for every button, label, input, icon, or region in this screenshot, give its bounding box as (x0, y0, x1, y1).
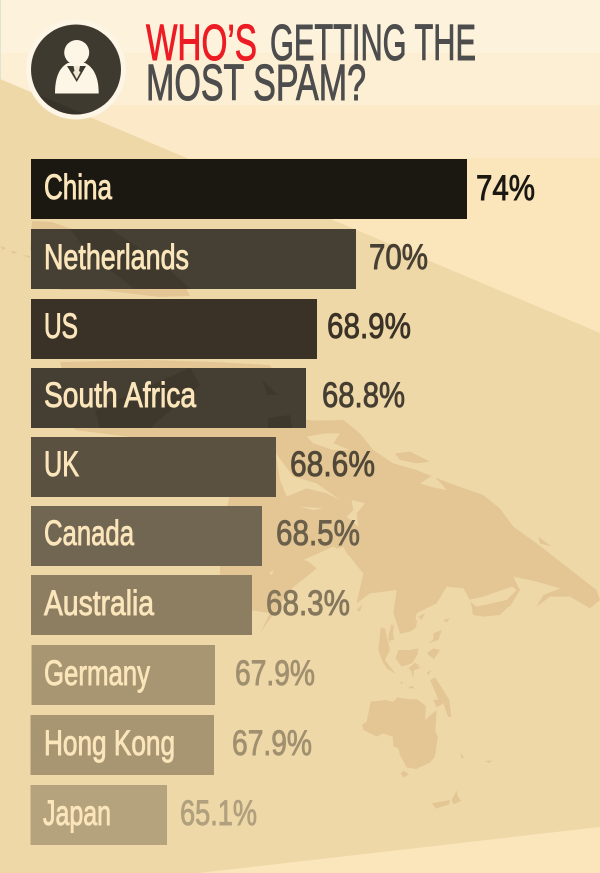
bar: China: China (44, 168, 112, 207)
bar: China: 74% (476, 169, 535, 208)
title: MOST SPAM? (146, 54, 366, 111)
map: left side fragments (0, 221, 310, 437)
bar: South Africa (31, 368, 405, 428)
icon: person in circle (26, 20, 126, 120)
bar: Germany (32, 645, 315, 705)
bar: Hong Kong (30, 715, 312, 775)
bar: UK: UK (44, 445, 79, 484)
bar: Canada: Canada (44, 514, 134, 553)
bar: Hong Kong: Hong Kong (44, 724, 175, 763)
bar: South Africa: South Africa (44, 376, 196, 415)
bar: Netherlands: 70% (369, 238, 428, 277)
title: WHO’S (146, 14, 257, 71)
bar: Netherlands (31, 229, 428, 289)
bar: UK: 68.6% (290, 445, 375, 484)
map: asia inlets (269, 433, 517, 607)
bar: China (31, 159, 535, 219)
map: asia (220, 417, 600, 640)
bar: Australia (31, 575, 350, 635)
map: southeast asia and oceania (362, 620, 492, 809)
bar: South Africa: 68.8% (322, 376, 405, 415)
bar: Canada: 68.5% (276, 514, 360, 553)
bar chart (30, 159, 535, 845)
bar: Netherlands: Netherlands (44, 238, 189, 277)
bar: Germany: 67.9% (235, 654, 315, 693)
bar: Japan (30, 785, 257, 845)
bar: Germany: Germany (44, 654, 150, 693)
bar: Japan: Japan (43, 794, 111, 833)
bar: US: 68.9% (327, 307, 411, 346)
bar: Australia: 68.3% (266, 584, 350, 623)
bar: UK (31, 437, 375, 497)
world map (0, 221, 600, 809)
bar: US: US (44, 307, 78, 346)
bar: Japan: 65.1% (180, 794, 257, 833)
bar: Canada (31, 506, 360, 566)
bar: Australia: Australia (44, 584, 154, 623)
title (146, 14, 476, 111)
bar: US (31, 299, 411, 359)
bar: Hong Kong: 67.9% (232, 724, 312, 763)
